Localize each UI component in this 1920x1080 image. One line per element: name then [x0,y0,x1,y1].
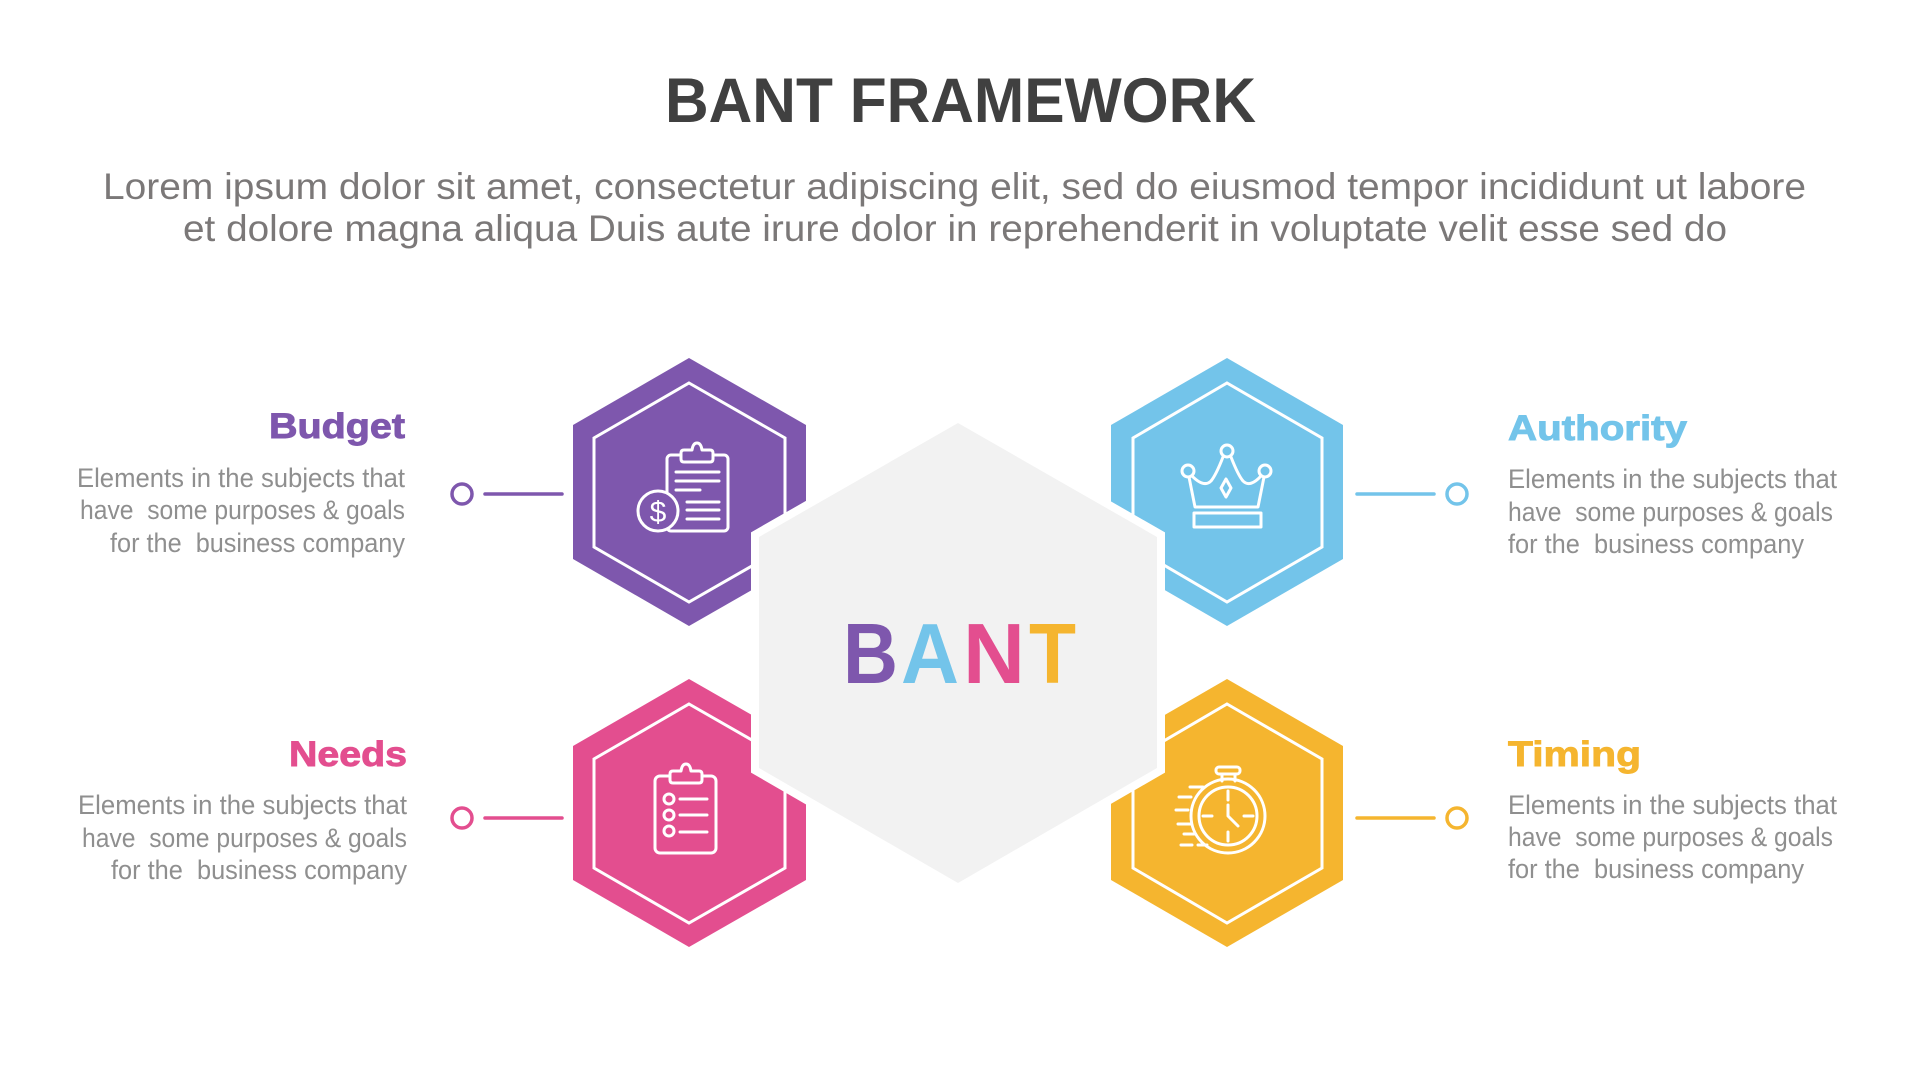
center BANT wordmark: A [901,607,959,702]
icon: crown [1182,445,1271,527]
needs connector [452,808,562,828]
timing heading: Timing [1508,735,1641,774]
subtitle text block [103,166,1806,249]
panel: budget [77,358,806,626]
center hexagon [759,423,1157,883]
needs description: Elements in the subjects that [78,790,407,820]
authority heading: Authority [1508,409,1688,448]
needs hexagon [573,679,806,947]
center BANT wordmark: N [963,607,1025,702]
needs inner outline [594,704,785,923]
needs description: for the business company [111,855,407,885]
budget description: for the business company [110,528,405,558]
authority connector [1357,484,1467,504]
subtitle text block: et dolore magna aliqua Duis aute irure dolor in reprehenderit in voluptate velit esse sed do [183,208,1727,249]
budget inner outline [594,383,785,602]
subtitle text block: Lorem ipsum dolor sit amet, consectetur adipiscing elit, sed do eiusmod tempor incididunt ut labore [103,166,1806,207]
timing description: have some purposes & goals [1508,822,1833,852]
timing hexagon [1111,679,1343,947]
authority inner outline [1133,383,1322,602]
panel: authority [1111,358,1837,626]
timing description: Elements in the subjects that [1508,790,1837,820]
icon: stopwatch [1176,767,1265,853]
timing description: for the business company [1508,854,1804,884]
title: BANT FRAMEWORK [665,66,1256,136]
authority description: for the business company [1508,529,1804,559]
needs heading: Needs [289,735,407,774]
budget description [77,463,405,558]
budget description: have some purposes & goals [80,495,405,525]
icon: clipboard with dollar coin: $ [650,496,667,529]
needs description: have some purposes & goals [82,823,407,853]
timing connector [1357,808,1467,828]
authority description: Elements in the subjects that [1508,464,1837,494]
timing description [1508,790,1837,884]
timing inner outline [1133,704,1322,923]
center BANT wordmark: B [843,607,898,702]
budget description: Elements in the subjects that [77,463,405,493]
panel: timing [1111,679,1837,947]
icon: clipboard with dollar coin [638,443,728,531]
budget heading: Budget [269,407,405,446]
authority description [1508,464,1837,559]
center BANT wordmark [843,607,1076,702]
center BANT wordmark: T [1029,607,1076,702]
budget connector [452,484,562,504]
budget hexagon [573,358,806,626]
needs description [78,790,407,885]
authority hexagon [1111,358,1343,626]
authority description: have some purposes & goals [1508,497,1833,527]
panel: needs [78,679,806,947]
icon: checklist clipboard [655,764,716,853]
